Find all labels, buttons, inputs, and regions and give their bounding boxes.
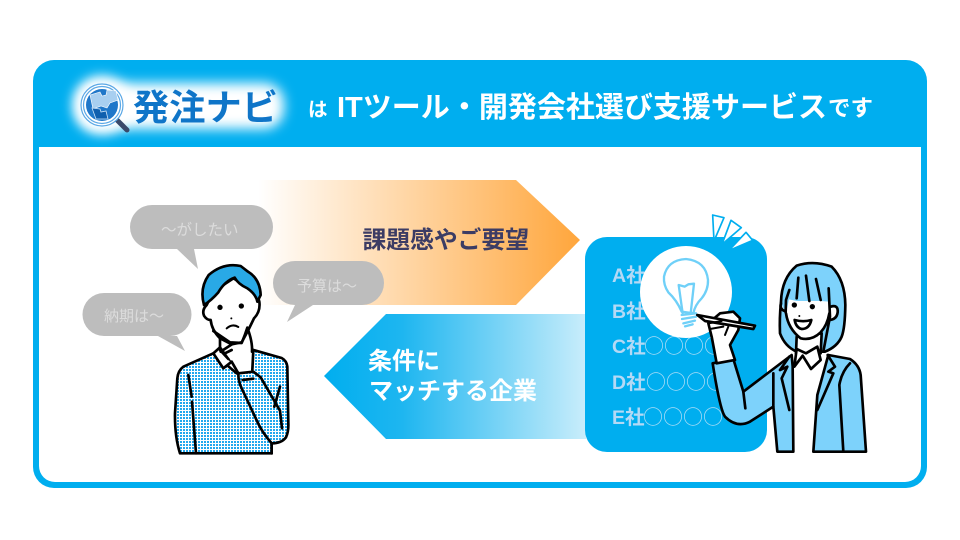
speech bubble: delivery: [82, 293, 192, 351]
hand with pen: [697, 312, 755, 363]
company rows: E社: [612, 407, 645, 429]
speech bubble: want to: ～がしたい: [161, 221, 239, 239]
header: tagline: ITツール・開発会社選び支援サービス: [337, 91, 827, 124]
icon: magnifier with puzzle: [81, 84, 127, 130]
jacket right: [813, 355, 866, 452]
jacket left: [713, 355, 793, 452]
panel: company list card: [585, 215, 767, 452]
head: [780, 263, 845, 353]
company rows: [612, 265, 726, 430]
speech bubble: budget: 予算は～: [297, 277, 357, 295]
header: logo: [73, 76, 284, 134]
company rows: ○○○○: [644, 330, 724, 359]
person: thinking man: [175, 265, 288, 453]
company rows: B社: [612, 301, 646, 323]
icon: lightbulb circle: [640, 246, 732, 338]
arrow label: matching companies: 条件に: [368, 348, 440, 375]
header: tagline: です: [828, 96, 873, 121]
collar: [794, 347, 821, 369]
company rows: ○○○○: [643, 401, 723, 430]
company rows: ○○○○: [646, 366, 726, 395]
arrow label: matching companies: マッチする企業: [369, 378, 537, 405]
head: [202, 265, 261, 359]
company rows: C社: [612, 336, 646, 358]
speech bubble: want to: [130, 205, 273, 269]
icon: spark lines: [713, 215, 753, 251]
company rows: D社: [612, 372, 646, 394]
hand on chin: [213, 328, 252, 352]
header: tagline: は: [308, 99, 328, 121]
company rows: A社: [612, 265, 646, 287]
arrow label: requests: 課題感やご要望: [362, 226, 529, 254]
person: woman with pen: [697, 263, 866, 452]
body: [713, 347, 866, 452]
speech bubble: budget: [273, 261, 384, 322]
speech bubble: delivery: 納期は～: [104, 308, 164, 325]
logo wordmark: 発注ナビ: [133, 87, 278, 128]
arrow: blue matching arrow: [324, 314, 586, 439]
panel: main frame: [33, 60, 927, 488]
arrow: orange request arrow: [258, 180, 580, 305]
shirt: [175, 330, 288, 453]
